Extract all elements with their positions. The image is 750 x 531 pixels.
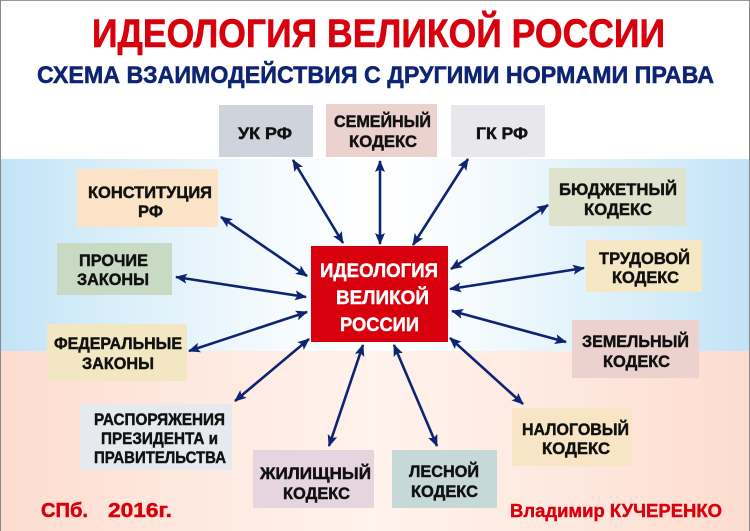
arrow: Жилищный кодекс bbox=[329, 345, 363, 446]
box: Конституция РФ bbox=[77, 169, 218, 227]
box: Семейный кодекс bbox=[326, 104, 437, 157]
box: Лесной кодекс: ЛЕСНОЙ bbox=[409, 462, 479, 481]
box: Трудовой кодекс bbox=[586, 240, 702, 292]
box: ГК РФ bbox=[451, 105, 545, 157]
arrow: Распоряжения bbox=[235, 339, 309, 401]
box: Конституция РФ: РФ bbox=[138, 203, 163, 221]
box: Налоговый кодекс: КОДЕКС bbox=[542, 440, 610, 458]
box: Бюджетный кодекс: БЮДЖЕТНЫЙ bbox=[559, 180, 677, 199]
box: Жилищный кодекс: КОДЕКС bbox=[283, 485, 350, 503]
box: Федеральные законы bbox=[47, 324, 187, 381]
box: Распоряжения Президента и Правительства: ПРАВИТЕЛЬСТВА bbox=[94, 449, 226, 467]
arrow: Конституция РФ bbox=[221, 217, 307, 276]
box: Семейный кодекс: СЕМЕЙНЫЙ bbox=[334, 112, 431, 131]
box: Прочие законы: ПРОЧИЕ bbox=[79, 252, 148, 270]
box: Распоряжения Президента и Правительства bbox=[80, 404, 232, 470]
box: Распоряжения Президента и Правительства: РАСПОРЯЖЕНИЯ bbox=[94, 411, 225, 429]
central box: ВЕЛИКОЙ bbox=[336, 287, 429, 309]
box: Трудовой кодекс: КОДЕКС bbox=[612, 269, 679, 287]
place and year: СПб. bbox=[41, 500, 88, 522]
box: Бюджетный кодекс bbox=[549, 168, 686, 226]
arrow: Бюджетный кодекс bbox=[451, 205, 548, 269]
author: Владимир КУЧЕРЕНКО bbox=[510, 501, 722, 521]
central box: РОССИИ bbox=[340, 315, 419, 336]
arrow: Налоговый кодекс bbox=[450, 338, 523, 404]
box: Земельный кодекс bbox=[572, 320, 699, 378]
box: Жилищный кодекс bbox=[253, 450, 374, 508]
box: УК РФ: УК РФ bbox=[238, 125, 292, 143]
title: ИДЕОЛОГИЯ ВЕЛИКОЙ РОССИИ bbox=[92, 10, 665, 56]
arrow: Земельный кодекс bbox=[452, 311, 566, 342]
arrow: Лесной кодекс bbox=[394, 345, 437, 446]
box: Налоговый кодекс bbox=[512, 408, 632, 466]
box: Лесной кодекс bbox=[392, 450, 497, 508]
arrow: Семейный кодекс bbox=[379, 161, 381, 244]
box: Лесной кодекс: КОДЕКС bbox=[411, 483, 478, 501]
arrow: УК РФ bbox=[293, 160, 343, 243]
box: Конституция РФ: КОНСТИТУЦИЯ bbox=[88, 184, 212, 202]
box: Земельный кодекс: ЗЕМЕЛЬНЫЙ bbox=[582, 332, 689, 351]
box: Прочие законы: ЗАКОНЫ bbox=[77, 271, 149, 289]
arrow: ГК РФ bbox=[413, 159, 468, 245]
box: Федеральные законы: ЗАКОНЫ bbox=[82, 355, 154, 373]
box: Бюджетный кодекс: КОДЕКС bbox=[584, 201, 652, 219]
box: Трудовой кодекс: ТРУДОВОЙ bbox=[599, 249, 690, 268]
box: Прочие законы bbox=[57, 243, 172, 295]
arrow: Трудовой кодекс bbox=[450, 268, 584, 289]
box: Распоряжения Президента и Правительства: ПРЕЗИДЕНТА и bbox=[101, 430, 218, 448]
arrow: Прочие законы bbox=[176, 277, 306, 297]
central box bbox=[311, 246, 448, 342]
box: Семейный кодекс: КОДЕКС bbox=[349, 133, 417, 151]
box: УК РФ bbox=[219, 105, 313, 157]
place and year bbox=[41, 500, 172, 522]
subtitle: СХЕМА ВЗАИМОДЕЙСТВИЯ С ДРУГИМИ НОРМАМИ ПРАВА bbox=[37, 61, 714, 89]
box: Налоговый кодекс: НАЛОГОВЫЙ bbox=[522, 420, 629, 439]
box: ГК РФ: ГК РФ bbox=[476, 125, 528, 143]
box: Федеральные законы: ФЕДЕРАЛЬНЫЕ bbox=[54, 335, 182, 353]
place and year: 2016г. bbox=[108, 500, 172, 522]
arrow: Федеральные законы bbox=[189, 312, 307, 351]
box: Жилищный кодекс: ЖИЛИЩНЫЙ bbox=[259, 464, 371, 483]
box: Земельный кодекс: КОДЕКС bbox=[603, 353, 670, 371]
central box: ИДЕОЛОГИЯ bbox=[320, 261, 438, 282]
